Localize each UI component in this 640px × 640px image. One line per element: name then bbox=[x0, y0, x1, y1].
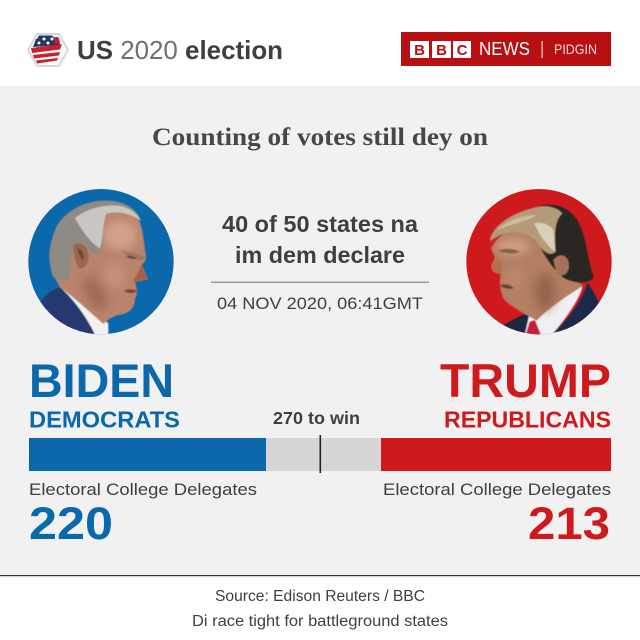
logo: BBC News Pidgin: B bbox=[414, 42, 425, 59]
Biden delegates bbox=[29, 480, 257, 549]
logo: BBC News Pidgin: PIDGIN bbox=[554, 42, 597, 57]
jacket bbox=[41, 287, 96, 337]
Trump delegates: Electoral College Delegates bbox=[383, 480, 611, 499]
icon: US flag hexagon bbox=[28, 34, 68, 66]
Biden delegates: 220 bbox=[29, 498, 113, 549]
candidate: Trump name and party: REPUBLICANS bbox=[444, 406, 611, 432]
label: 270 to win: 270 to win bbox=[273, 408, 360, 428]
hair bbox=[49, 201, 141, 280]
ear bbox=[553, 255, 569, 275]
heading: US 2020 election: US 2020 election bbox=[77, 35, 283, 65]
text: states declared: 40 of 50 states na bbox=[222, 211, 419, 237]
bar chart: delegates bbox=[29, 435, 611, 473]
text: timestamp: 04 NOV 2020, 06:41GMT bbox=[217, 294, 423, 313]
text: states declared bbox=[222, 211, 419, 268]
skin shading bbox=[103, 220, 137, 250]
portrait: Biden bbox=[28, 189, 174, 337]
head and neck skin bbox=[491, 227, 583, 321]
text: states declared: im dem declare bbox=[235, 242, 405, 268]
logo: BBC News Pidgin bbox=[401, 32, 611, 66]
nose shadow bbox=[133, 265, 148, 282]
mouth bbox=[500, 284, 514, 289]
footer: source and note: Source: Edison Reuters / BBC bbox=[215, 588, 425, 605]
head and neck skin bbox=[53, 205, 148, 324]
jacket bbox=[503, 314, 530, 333]
brow and eye bbox=[120, 250, 146, 260]
portrait: Trump bbox=[466, 189, 612, 337]
logo: BBC News Pidgin: NEWS bbox=[479, 39, 530, 59]
candidate: Trump name and party bbox=[440, 354, 611, 432]
candidate: Biden name and party: DEMOCRATS bbox=[29, 406, 180, 432]
logo: BBC News Pidgin: B bbox=[436, 42, 447, 59]
candidate: Biden name and party: BIDEN bbox=[29, 354, 174, 407]
nose shadow bbox=[492, 258, 502, 273]
blond hair bbox=[490, 206, 562, 254]
candidate: Biden name and party bbox=[29, 354, 180, 432]
brow and eye bbox=[498, 249, 520, 253]
footer: source and note bbox=[192, 588, 448, 630]
ear bbox=[73, 243, 88, 269]
footer: source and note: Di race tight for battleground states bbox=[192, 613, 448, 630]
shirt bbox=[524, 285, 582, 337]
Trump delegates: 213 bbox=[528, 498, 610, 549]
title: counting of votes: Counting of votes still dey on bbox=[152, 124, 488, 151]
Trump delegates bbox=[383, 480, 611, 549]
logo: BBC News Pidgin: C bbox=[457, 42, 468, 59]
mouth bbox=[124, 289, 137, 293]
main grey panel bbox=[0, 86, 640, 575]
dark hair bbox=[532, 205, 594, 282]
Biden delegates: Electoral College Delegates bbox=[29, 480, 257, 499]
candidate: Trump name and party: TRUMP bbox=[440, 354, 611, 407]
